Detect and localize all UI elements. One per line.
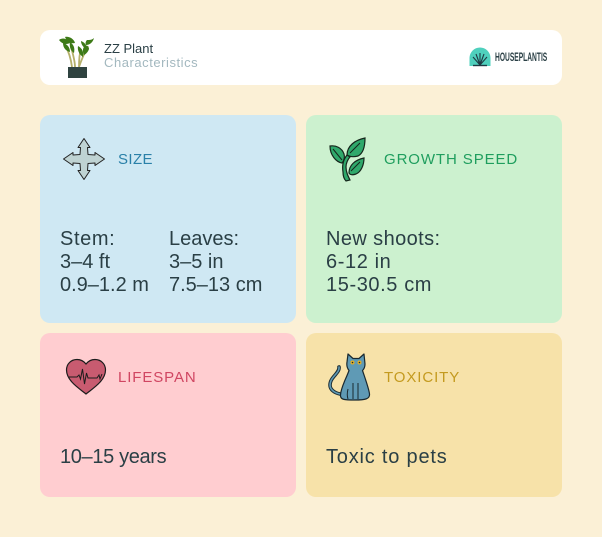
growth text: 15-30.5 cm [326, 274, 432, 296]
leaves text: 3–5 in [169, 251, 224, 273]
panel: size [40, 115, 296, 323]
stem text: 3–4 ft [60, 251, 110, 273]
logo: Houseplantis [470, 48, 547, 66]
icon: sprout [329, 137, 366, 182]
lifespan text: 10–15 years [60, 446, 166, 468]
logo wordmark: HOUSEPLANTIS [495, 52, 547, 64]
icon: four-way arrows [63, 138, 105, 180]
panel: toxicity [306, 333, 562, 497]
title text: ZZ Plant [104, 41, 153, 56]
icon: cat [328, 353, 370, 401]
heading: TOXICITY [384, 369, 460, 386]
icon: heart with pulse [66, 358, 106, 395]
stem text [60, 228, 149, 296]
subtitle text: Characteristics [104, 55, 198, 70]
heading: GROWTH SPEED [384, 151, 518, 168]
panel: growth speed [306, 115, 562, 323]
growth text [326, 228, 440, 296]
header bar [40, 30, 562, 85]
leaves text: Leaves: [169, 228, 239, 250]
panel: lifespan [40, 333, 296, 497]
growth text: New shoots: [326, 228, 440, 250]
pot [68, 67, 87, 78]
toxicity text: Toxic to pets [326, 446, 448, 468]
stem text: 0.9–1.2 m [60, 274, 149, 296]
growth text: 6-12 in [326, 251, 391, 273]
leaves text [169, 228, 262, 296]
icon: potted ZZ plant [59, 36, 94, 78]
stem text: Stem: [60, 228, 115, 250]
heading: SIZE [118, 151, 153, 168]
logo mark [470, 48, 490, 66]
heading: LIFESPAN [118, 369, 197, 386]
leaves text: 7.5–13 cm [169, 274, 262, 296]
